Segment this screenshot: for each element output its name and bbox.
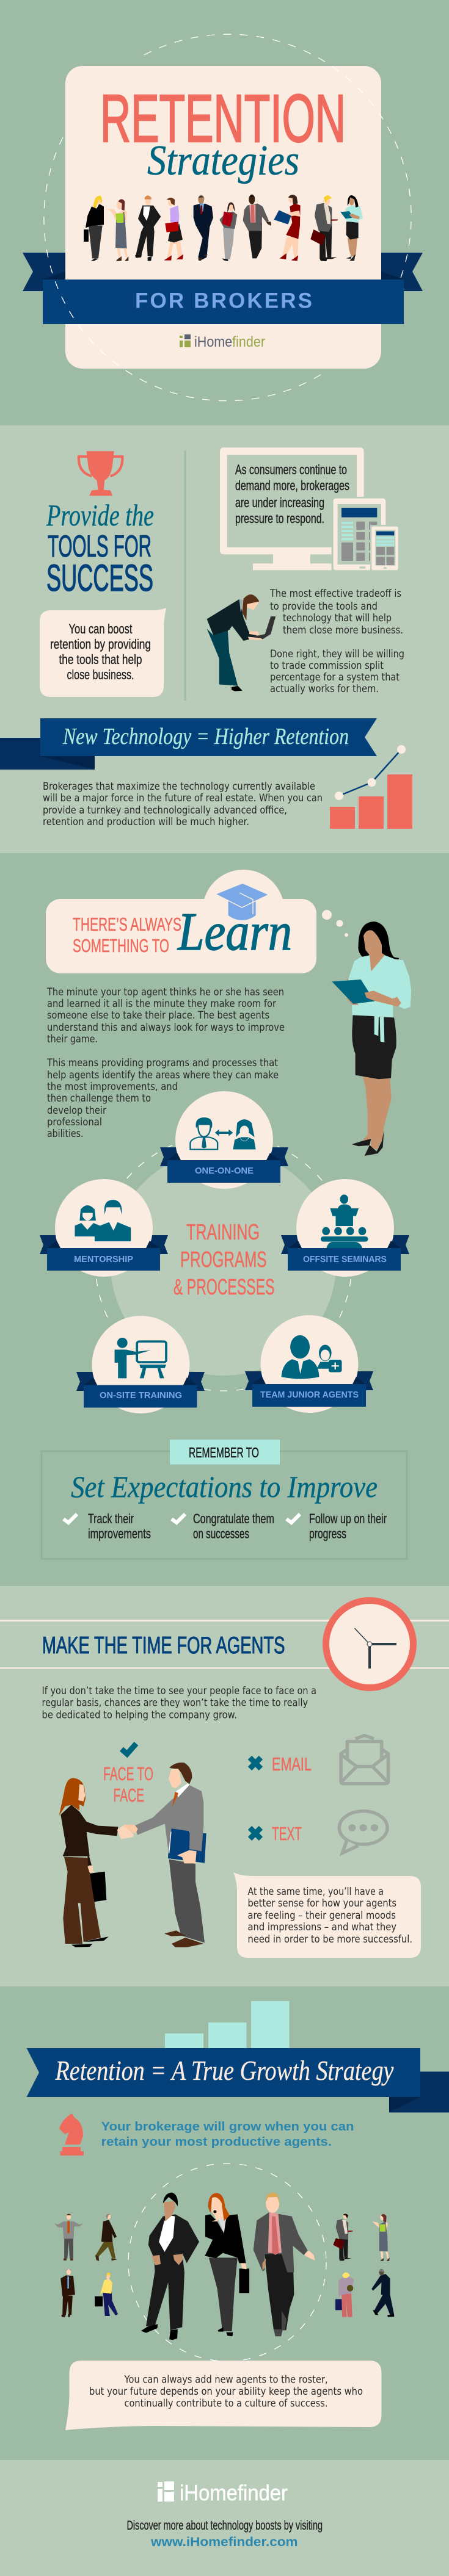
medallion: offsite seminars: [281, 1179, 409, 1277]
icon: trophy: [79, 451, 122, 496]
thought dots: [322, 910, 348, 937]
callout: boost retention: the tools that help: [59, 652, 142, 667]
text: your brokerage will grow: Your brokerage will grow when you can: [101, 2120, 354, 2134]
callout: you can always add: continually contribute to a culture of success.: [125, 2397, 327, 2409]
small agent: walking dark suit: [371, 2269, 394, 2317]
heading: make the time for agents: MAKE THE TIME FOR AGENTS: [42, 1633, 285, 1659]
text: monitor message: demand more, brokerages: [235, 478, 349, 493]
callout: boost retention: retention by providing: [50, 637, 151, 652]
text: tradeoff: [269, 588, 404, 695]
text: the minute: understand this and always look for ways to improve: [47, 1022, 285, 1033]
heading: provide the tools for success: Provide the: [46, 498, 154, 532]
callout: at the same time: need in order to be more successful.: [248, 1933, 412, 1945]
callout: at the same time: better sense for how your agents: [248, 1897, 396, 1909]
icon: two people: [75, 1200, 131, 1241]
text: if you don't: [42, 1685, 316, 1721]
row: email crossed out: [250, 1736, 388, 1784]
text: programs and processes: develop their: [47, 1105, 106, 1116]
person 7: [243, 195, 271, 258]
heading bubble: THERE’S ALWAYS: [73, 914, 181, 935]
text: monitor message: As consumers continue to: [235, 462, 347, 477]
icon: chat bubble: [339, 1811, 387, 1853]
callout: at the same time: and impressions – and what they: [248, 1921, 396, 1933]
medallion: offsite seminars: OFFSITE SEMINARS: [303, 1254, 387, 1265]
panel: footer: [0, 2460, 449, 2576]
small agent: phone man: [60, 2269, 75, 2317]
text: monitor message: are under increasing: [235, 495, 324, 510]
label: face to face: [103, 1763, 153, 1806]
panel: provide the tools: [0, 425, 449, 853]
callout: at the same time: are feeling – their general moods: [248, 1910, 396, 1921]
panel: make the time: [0, 1586, 449, 1986]
box: set expectations: [42, 1440, 407, 1559]
callout: boost retention: close business.: [67, 667, 134, 682]
chart: mint bars: [165, 2001, 290, 2048]
person 4: [164, 198, 183, 261]
icon: one-on-one people: [190, 1117, 256, 1149]
heading: provide the tools for success: SUCCESS: [46, 557, 153, 599]
logo: iHomefinder: iHomefinder: [194, 334, 265, 350]
list: three checks: Follow up on their: [309, 1511, 387, 1526]
text: the minute: someone else to take their place. The best agents: [47, 1009, 269, 1021]
ribbon: new technology: [0, 718, 377, 770]
small agent: grey suit: [54, 2213, 83, 2260]
text: tradeoff: The most effective tradeoff is: [269, 588, 401, 599]
text: programs and processes: professional: [47, 1116, 102, 1128]
text: the minute: their game.: [47, 1033, 98, 1045]
label: face to face: FACE TO: [103, 1763, 153, 1784]
figure: handshake: [59, 1762, 206, 1947]
text: brokerages: retention and production will be much higher.: [43, 816, 249, 828]
logo: white iHomefinder: iHomefinder: [180, 2480, 288, 2505]
text: if you don't: be dedicated to helping the company grow.: [42, 1709, 237, 1721]
label: face to face: FACE: [114, 1784, 144, 1806]
medallion: one-on-one: ONE-ON-ONE: [195, 1166, 254, 1176]
small agent: walking man: [95, 2213, 117, 2261]
person 1: [84, 196, 104, 261]
text: programs and processes: then challenge them to: [47, 1092, 151, 1104]
text: if you don't: regular basis, chances are they won’t take the time to really: [42, 1697, 308, 1709]
text: if you don't: If you don’t take the time to see your people face to face on a: [42, 1685, 316, 1697]
callout: you can always add: [65, 2361, 381, 2430]
icon: speaker and audience: [321, 1194, 368, 1248]
text: your brokerage will grow: retain your most productive agents.: [101, 2135, 332, 2149]
callout: boost retention: [40, 608, 166, 697]
heading bubble: Learn: [177, 903, 292, 962]
row: text crossed out: TEXT: [272, 1823, 302, 1844]
text: tradeoff: Done right, they will be willing: [270, 648, 404, 660]
text: training programs and processes: PROGRAMS: [180, 1247, 266, 1272]
text: brokerages: provide a turnkey and technologically advanced office,: [43, 804, 287, 816]
person 10: [340, 195, 363, 261]
heading: provide the tools for success: TOOLS FOR: [48, 529, 151, 563]
text: brokerages: Brokerages that maximize the technology currently available: [43, 781, 315, 792]
medallion: on-site training: ON-SITE TRAINING: [100, 1390, 182, 1401]
person 3: [135, 195, 161, 261]
figure: woman with clipboard: [332, 922, 411, 1156]
icon: monitor, tablet and phone: [220, 447, 399, 570]
panel: header: [0, 0, 449, 425]
ribbon: retention: Retention = A True Growth Strategy: [55, 2055, 394, 2086]
banner: for brokers: [43, 280, 404, 324]
text: training programs and processes: [173, 1219, 275, 1299]
medallion: on-site training: [76, 1316, 205, 1413]
callout: you can always add: but your future depends on your ability keep the agents who: [89, 2386, 363, 2397]
text: programs and processes: help agents identify the areas where they can make: [47, 1069, 279, 1081]
text: website: www.iHomefinder.com: [150, 2535, 298, 2549]
icon: envelope: [341, 1736, 388, 1784]
small agent: woman with green book: [372, 2214, 390, 2261]
tag: remember to: [170, 1440, 280, 1465]
text: programs and processes: abilities.: [47, 1128, 83, 1139]
callout: at the same time: [233, 1872, 421, 1958]
text: monitor message: pressure to respond.: [235, 511, 324, 526]
list: three checks: Track their: [88, 1511, 134, 1526]
figure: woman at laptop: [207, 594, 276, 691]
row: text crossed out: [250, 1811, 387, 1853]
text: your brokerage will grow: [101, 2120, 354, 2149]
icon: trainer at board: [115, 1338, 166, 1378]
ribbon: new technology: New Technology = Higher Retention: [62, 724, 349, 749]
banner: for brokers: FOR BROKERS: [135, 289, 312, 312]
list: three checks: on successes: [193, 1526, 249, 1542]
person 6: [219, 202, 237, 261]
icon: agent and junior: [282, 1335, 342, 1379]
text: tradeoff: percentage for a system that: [270, 671, 400, 683]
person 2: [107, 199, 128, 261]
row of ten business people: [84, 195, 363, 261]
ribbon: retention: [27, 2048, 449, 2113]
text: tradeoff: them close more business.: [283, 624, 403, 636]
ribbon tails: [23, 253, 423, 291]
list: three checks: improvements: [88, 1526, 151, 1542]
person 5: [194, 195, 213, 261]
heading: provide the tools for success: [46, 498, 154, 599]
text: programs and processes: the most improvements, and: [47, 1081, 178, 1092]
person 9: [310, 195, 338, 261]
icon: clock: [323, 1597, 417, 1691]
row: email crossed out: EMAIL: [272, 1753, 312, 1775]
text: training programs and processes: & PROCESSES: [173, 1274, 275, 1299]
text: tradeoff: actually works for them.: [270, 683, 379, 695]
medallion: team junior agents: TEAM JUNIOR AGENTS: [260, 1390, 359, 1400]
medallion: team junior agents: [245, 1315, 373, 1413]
medallion: mentorship: MENTORSHIP: [74, 1254, 133, 1265]
text: tradeoff: to trade commission split: [270, 660, 384, 671]
box: set expectations: Set Expectations to Improve: [71, 1470, 378, 1504]
medallion: mentorship: [40, 1179, 168, 1277]
heading bubble: [46, 870, 316, 973]
big agent: man in grey suit: [254, 2193, 315, 2336]
text: training programs and processes: TRAINING: [186, 1219, 260, 1244]
text: tradeoff: to provide the tools and: [270, 601, 378, 612]
text: tradeoff: technology that will help: [283, 612, 392, 624]
text: programs and processes: [46, 1057, 279, 1139]
big agent: man in black suit: [141, 2193, 199, 2340]
callout: boost retention: You can boost: [68, 621, 132, 637]
text: brokerages: [43, 781, 323, 828]
heading bubble: SOMETHING TO: [73, 935, 169, 956]
chart: rising bars and line: [330, 745, 412, 829]
icon: graduation cap: [215, 883, 269, 920]
list: three checks: [64, 1511, 387, 1542]
panel: always something to learn: [0, 853, 449, 1586]
medallion: one-on-one: [160, 1091, 288, 1189]
list: three checks: Congratulate them: [193, 1511, 274, 1526]
tag: remember to: REMEMBER TO: [189, 1445, 259, 1460]
small agent: yellow shirt woman: [95, 2273, 118, 2316]
hub circle: [110, 1150, 336, 1376]
dashed circle arcs: [44, 34, 411, 401]
list: three checks: progress: [309, 1526, 346, 1542]
text: the minute: [46, 986, 285, 1045]
small agent: lilac woman: [335, 2272, 354, 2317]
text: the minute: and learned it all is the minute they make room for: [47, 998, 276, 1009]
small agent: man with briefcase: [333, 2213, 353, 2260]
figures: agents group: [54, 2193, 394, 2340]
title card: [65, 66, 381, 369]
subtitle: strategies: Strategies: [147, 137, 299, 184]
big agent: woman on phone: [205, 2193, 249, 2336]
text: discover more: Discover more about technology boosts by visiting: [127, 2519, 323, 2533]
text: brokerages: will be a major force in the future of real estate. When you can: [43, 792, 323, 804]
text: programs and processes: This means providing programs and processes that: [46, 1057, 278, 1069]
icon: teal check: [122, 1744, 136, 1754]
icon: chess knight: [59, 2113, 84, 2156]
panel: retention growth strategy: [0, 1986, 449, 2460]
callout: you can always add: You can always add new agents to the roster,: [124, 2374, 327, 2385]
text: the minute: The minute your top agent thinks he or she has seen: [46, 986, 284, 998]
person 8: [274, 195, 301, 261]
callout: at the same time: At the same time, you’ll have a: [248, 1886, 384, 1897]
text: monitor message: [235, 462, 349, 526]
